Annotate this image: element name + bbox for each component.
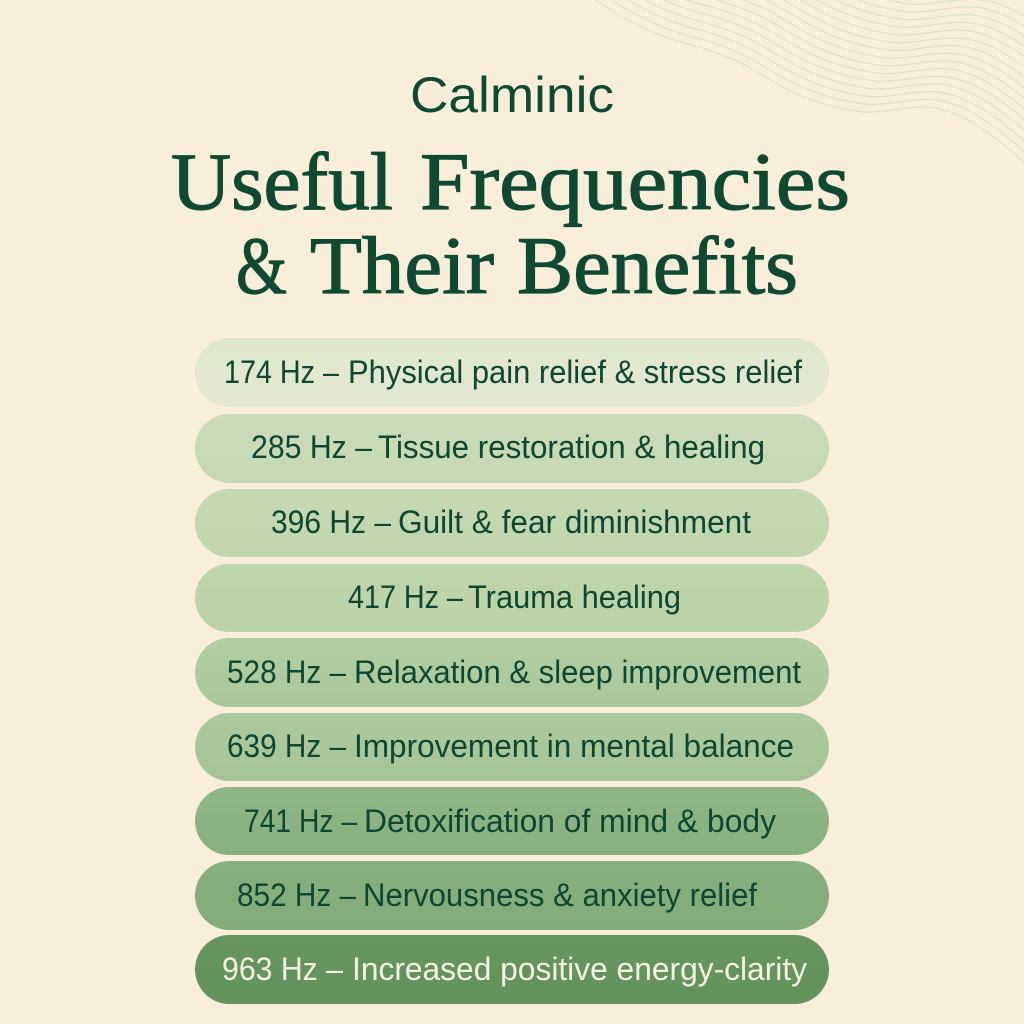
title: Benefits: [517, 220, 798, 311]
decorative wave lines: [540, 0, 1024, 168]
row: 639 Hz: 639 Hz –: [227, 728, 346, 764]
row: 174 Hz: [195, 338, 829, 407]
row: 741 Hz: Detoxification of mind & body: [364, 803, 776, 839]
row: 528 Hz: [195, 638, 829, 707]
title: Their: [310, 220, 494, 311]
frequency list: [195, 338, 829, 1004]
row: 285 Hz: 285 Hz –: [251, 429, 372, 465]
title: Useful: [171, 136, 393, 227]
row: 417 Hz: 417 Hz –: [348, 579, 463, 615]
row: 174 Hz: 174 Hz –: [224, 354, 339, 390]
row: 396 Hz: 396 Hz –: [271, 504, 391, 540]
row: 396 Hz: Guilt & fear diminishment: [398, 504, 751, 540]
row: 852 Hz: 852 Hz –: [237, 877, 356, 913]
row: 174 Hz: Physical pain relief & stress relief: [348, 354, 802, 390]
row: 639 Hz: Improvement in mental balance: [354, 728, 794, 764]
row: 852 Hz: [195, 861, 829, 930]
brand name: Calminic: [410, 67, 614, 123]
row: 963 Hz: 963 Hz –: [222, 951, 343, 987]
row: 417 Hz: Trauma healing: [468, 579, 681, 615]
row: 741 Hz: 741 Hz –: [244, 803, 357, 839]
title: [171, 136, 850, 311]
row: 528 Hz: Relaxation & sleep improvement: [354, 654, 801, 690]
row: 528 Hz: 528 Hz –: [227, 654, 346, 690]
row: 963 Hz: [195, 935, 829, 1004]
row: 285 Hz: [195, 414, 829, 483]
row: 963 Hz: Increased positive energy-clarity: [352, 951, 807, 987]
row: 741 Hz: [195, 787, 829, 855]
title: &: [236, 220, 287, 311]
row: 639 Hz: [195, 713, 829, 781]
title: Frequencies: [420, 136, 850, 227]
row: 285 Hz: Tissue restoration & healing: [378, 429, 765, 465]
row: 417 Hz: [195, 564, 829, 632]
row: 852 Hz: Nervousness & anxiety relief: [363, 877, 757, 913]
row: 396 Hz: [195, 489, 829, 557]
